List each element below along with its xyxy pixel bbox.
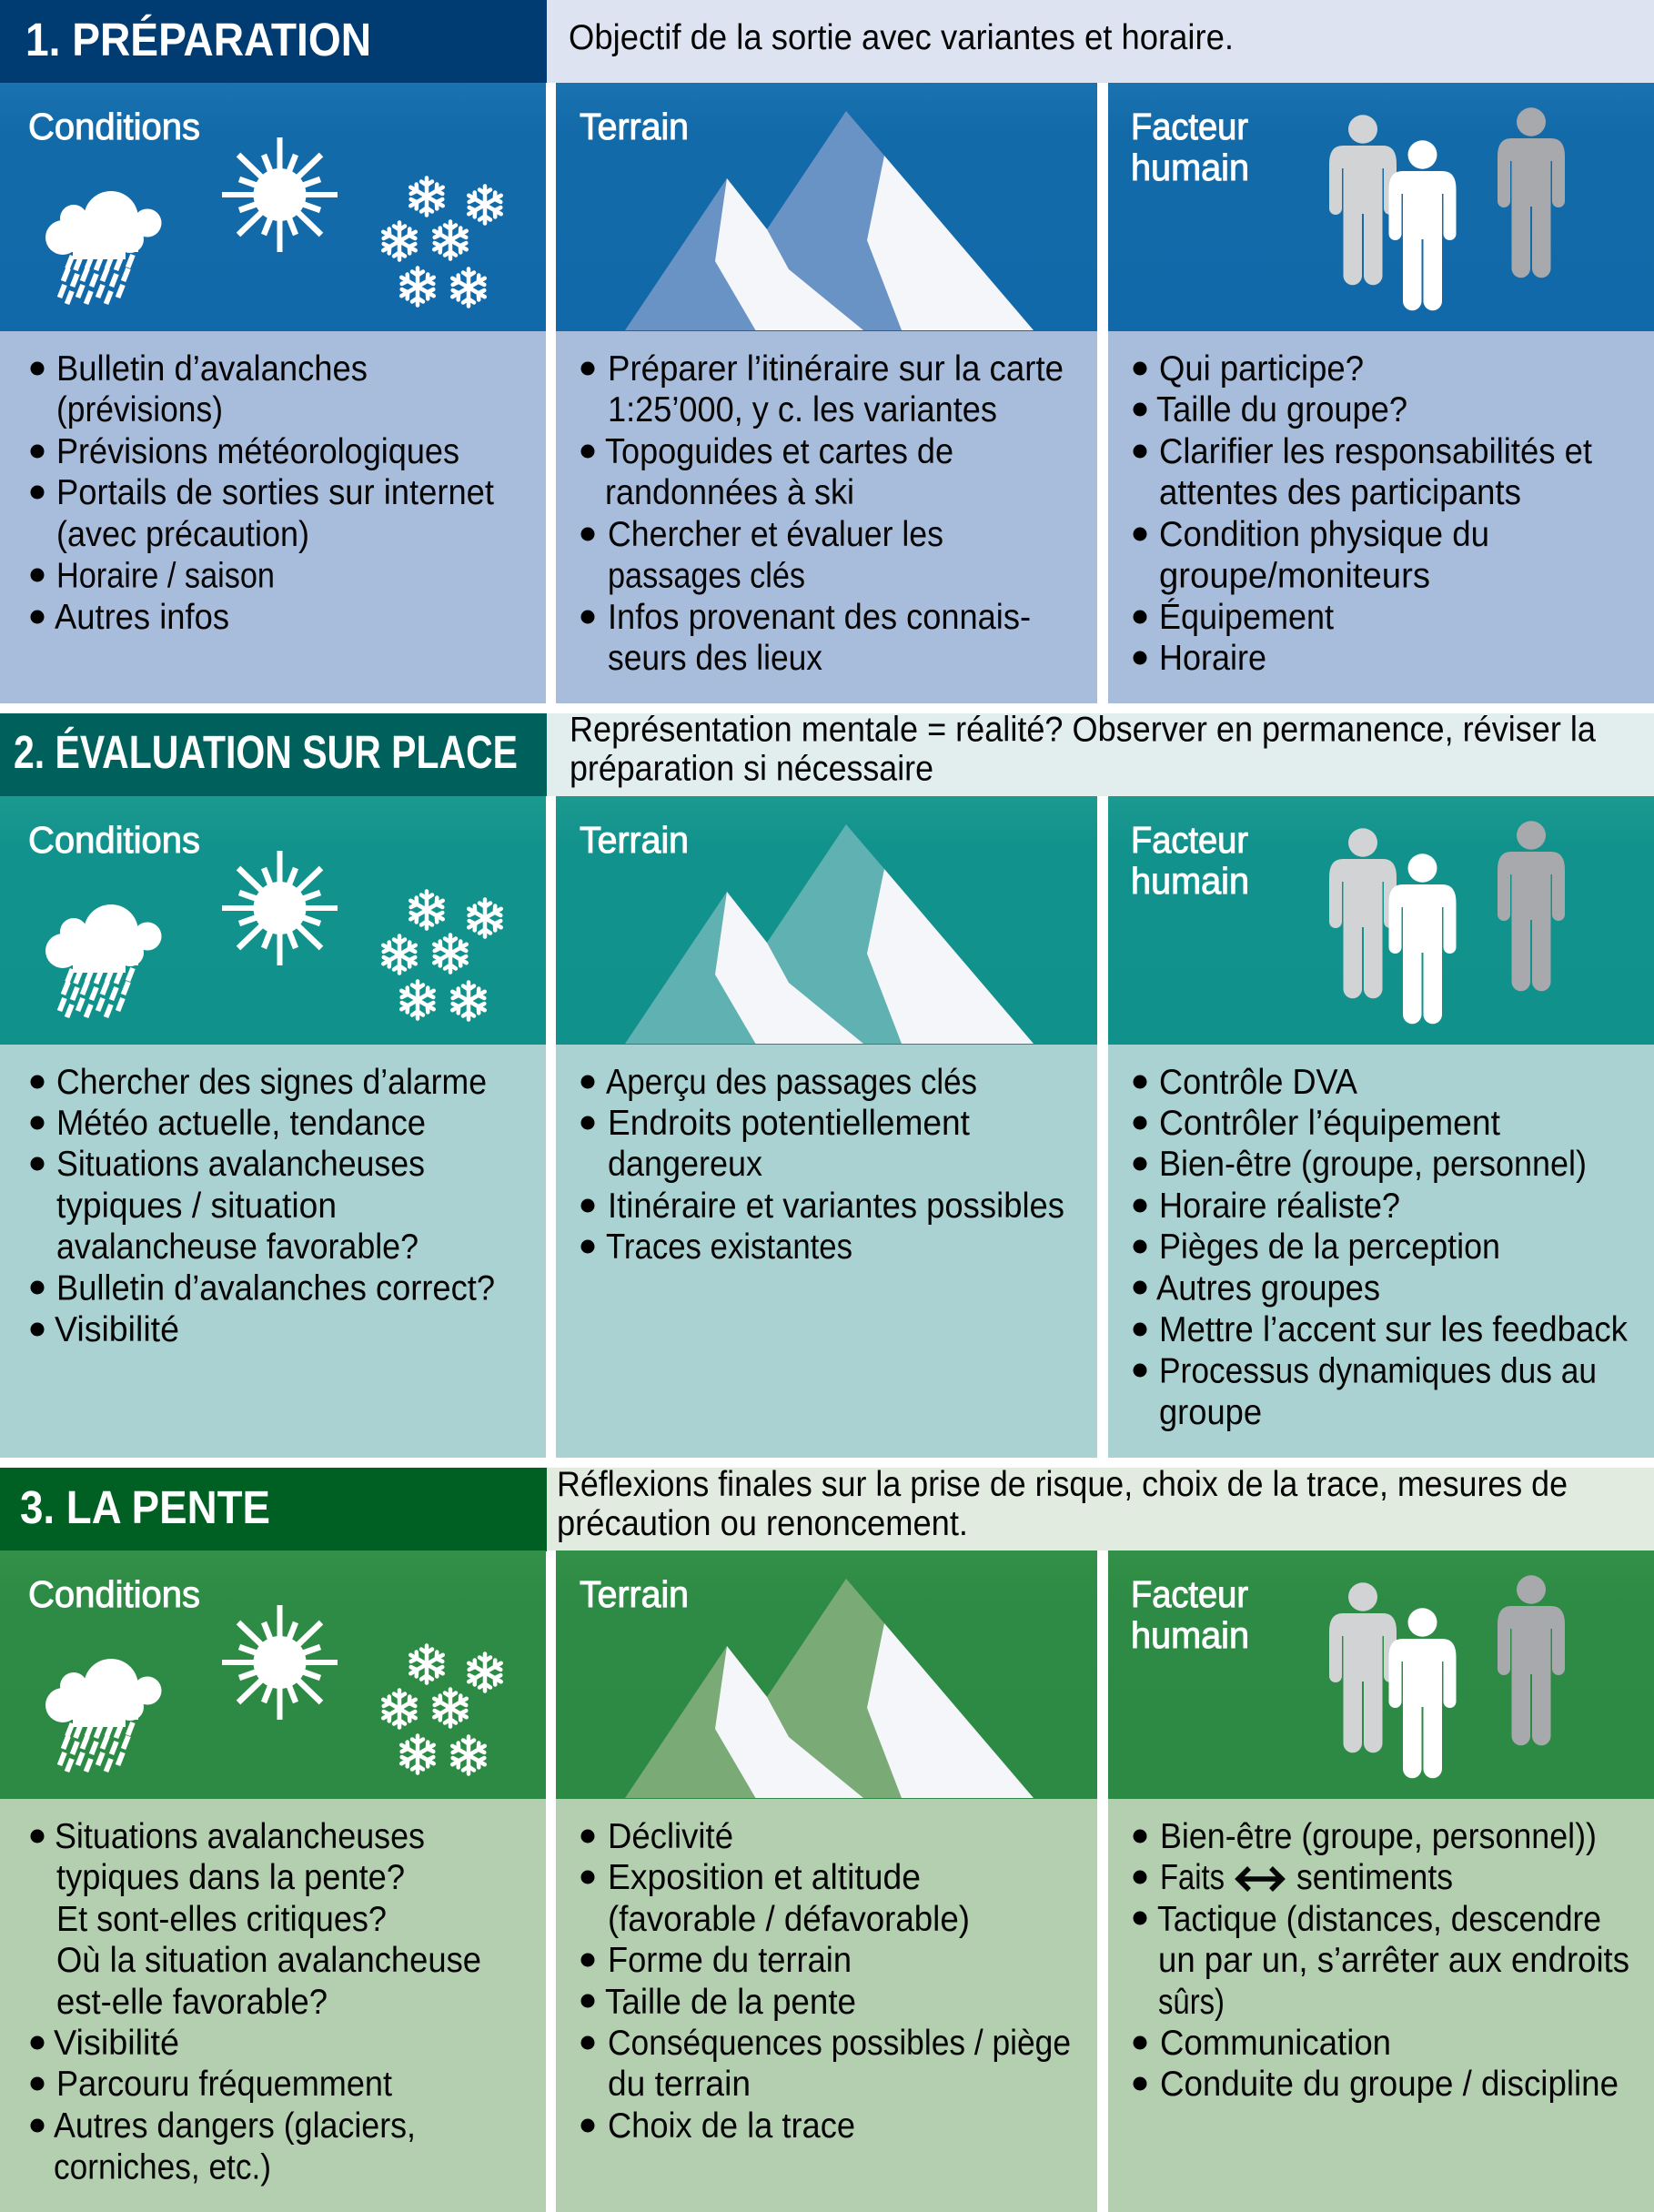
list: facteur humain: un par un, s’arrêter aux endroits	[1158, 1941, 1629, 1980]
section 1: préparation	[0, 0, 1654, 703]
icons: rain cloud, sun, snowflakes	[45, 137, 504, 306]
list: facteur humain: Contrôler l’équipement	[1159, 1104, 1500, 1143]
list: facteur humain: sentiments	[1296, 1858, 1453, 1897]
list: conditions: corniches, etc.)	[54, 2147, 271, 2187]
list: conditions	[31, 1063, 495, 1349]
list: conditions: Où la situation avalancheuse	[56, 1941, 481, 1980]
heading: terrain: Terrain	[580, 1573, 689, 1615]
heading: facteur humain: humain	[1131, 860, 1249, 902]
list: facteur humain: Bien-être (groupe, personnel)	[1159, 1145, 1587, 1184]
list: terrain: Préparer l’itinéraire sur la carte	[608, 349, 1064, 389]
list: facteur humain: attentes des participants	[1159, 473, 1521, 512]
heading: conditions: Conditions	[28, 106, 200, 147]
panel: terrain	[556, 83, 1097, 703]
icon: people	[1329, 107, 1565, 310]
list: terrain	[580, 349, 1064, 678]
list: terrain: Taille de la pente	[605, 1983, 856, 2022]
list: terrain: Conséquences possibles / piège	[608, 2024, 1071, 2063]
list: conditions: Autres infos	[55, 598, 229, 637]
panel: facteur humain	[1108, 796, 1654, 1458]
list: conditions: Situations avalancheuses	[55, 1817, 425, 1856]
list: terrain: dangereux	[608, 1145, 762, 1184]
list: facteur humain: Conduite du groupe / discipline	[1160, 2065, 1619, 2104]
list: conditions: Visibilité	[55, 1310, 179, 1349]
intro bar	[547, 0, 1654, 83]
icon: mountains	[625, 824, 1034, 1044]
title bar: 2. Évaluation sur place: 2. ÉVALUATION SUR PLACE	[14, 726, 518, 778]
icon: mountains	[625, 1579, 1034, 1798]
heading: facteur humain: humain	[1131, 1614, 1249, 1656]
list: conditions: Et sont-elles critiques?	[56, 1900, 387, 1939]
list: facteur humain: groupe/moniteurs	[1159, 557, 1430, 595]
list: facteur humain: groupe	[1159, 1393, 1262, 1432]
icons: rain cloud, sun, snowflakes	[45, 851, 504, 1019]
intro bar	[547, 1465, 1654, 1550]
list: conditions: est-elle favorable?	[56, 1983, 328, 2022]
list: terrain: Chercher et évaluer les	[608, 515, 943, 554]
list: terrain: Itinéraire et variantes possibles	[608, 1187, 1064, 1226]
list: conditions: typiques / situation	[56, 1187, 337, 1226]
list: facteur humain: Communication	[1160, 2024, 1391, 2063]
title bar: 2. Évaluation sur place	[0, 713, 547, 796]
list: facteur humain: Faits	[1160, 1858, 1225, 1897]
heading: facteur humain: Facteur	[1131, 1573, 1248, 1615]
list: terrain	[580, 1817, 1071, 2146]
list: terrain: seurs des lieux	[608, 639, 822, 678]
list: conditions: avalancheuse favorable?	[56, 1227, 419, 1267]
list: conditions: Bulletin d’avalanches correct?	[56, 1268, 495, 1308]
heading: facteur humain: Facteur	[1131, 819, 1248, 861]
list: facteur humain: Horaire	[1159, 639, 1266, 678]
list: conditions: Visibilité	[54, 2024, 179, 2063]
list: terrain: Aperçu des passages clés	[606, 1063, 977, 1102]
panel: terrain	[556, 1550, 1097, 2212]
title bar: 1. Préparation: 1. PRÉPARATION	[25, 14, 371, 66]
list: conditions: Parcouru fréquemment	[56, 2065, 392, 2104]
heading: conditions: Conditions	[28, 819, 200, 861]
list: conditions: Portails de sorties sur internet	[56, 473, 494, 512]
list: conditions: Horaire / saison	[56, 557, 275, 595]
title bar: 1. Préparation	[0, 0, 547, 83]
list: conditions: Météo actuelle, tendance	[56, 1104, 426, 1143]
list: conditions: (prévisions)	[56, 390, 223, 429]
heading: facteur humain	[1131, 819, 1249, 902]
heading: facteur humain	[1131, 1573, 1249, 1656]
list: conditions: Prévisions météorologiques	[56, 432, 459, 471]
list: conditions: Chercher des signes d’alarme	[56, 1063, 487, 1102]
list: conditions: Autres dangers (glaciers,	[54, 2106, 416, 2146]
list: terrain: Déclivité	[608, 1817, 733, 1856]
heading: facteur humain: humain	[1131, 146, 1249, 188]
intro bar	[547, 710, 1654, 796]
list: terrain: Infos provenant des connais-	[608, 598, 1031, 637]
section 2: évaluation sur place	[0, 710, 1654, 1458]
panel: conditions	[0, 796, 546, 1458]
heading: conditions: Conditions	[28, 1573, 200, 1615]
list: terrain: passages clés	[608, 557, 805, 595]
list: facteur humain: Horaire réaliste?	[1159, 1187, 1400, 1226]
intro bar: préparation si nécessaire	[570, 750, 933, 788]
panel: conditions	[0, 83, 546, 703]
intro bar: précaution ou renoncement.	[557, 1504, 968, 1543]
list: conditions	[31, 1817, 481, 2187]
list: facteur humain: Autres groupes	[1156, 1268, 1380, 1308]
icon: people	[1329, 821, 1565, 1024]
list: facteur humain: Mettre l’accent sur les feedback	[1159, 1310, 1628, 1349]
list: terrain: Endroits potentiellement	[608, 1104, 970, 1143]
icon: people	[1329, 1575, 1565, 1778]
heading: facteur humain: Facteur	[1131, 106, 1248, 147]
list: facteur humain: Taille du groupe?	[1156, 390, 1407, 429]
list: terrain: randonnées à ski	[605, 473, 854, 512]
intro bar: Objectif de la sortie avec variantes et horaire.	[569, 18, 1234, 57]
heading: facteur humain	[1131, 106, 1249, 188]
list: facteur humain	[1134, 349, 1592, 678]
title bar: 3. La pente: 3. LA PENTE	[20, 1481, 270, 1533]
list: terrain: Traces existantes	[606, 1227, 852, 1267]
list: facteur humain: Pièges de la perception	[1159, 1227, 1500, 1267]
heading: terrain: Terrain	[580, 106, 689, 147]
panel: terrain	[556, 796, 1097, 1458]
list: terrain: du terrain	[608, 2065, 751, 2104]
list: conditions: typiques dans la pente?	[56, 1858, 405, 1897]
panel: facteur humain	[1108, 83, 1654, 703]
panel: conditions	[0, 1550, 546, 2212]
list: facteur humain: Équipement	[1159, 598, 1334, 637]
list: terrain: 1:25’000, y c. les variantes	[608, 390, 997, 429]
list: facteur humain: Bien-être (groupe, personnel))	[1160, 1817, 1597, 1856]
list: conditions: Situations avalancheuses	[56, 1145, 425, 1184]
intro bar: Réflexions finales sur la prise de risque, choix de la trace, mesures de	[557, 1465, 1568, 1504]
list: terrain: Exposition et altitude	[608, 1858, 921, 1897]
title bar: 3. La pente	[0, 1468, 547, 1551]
icons: rain cloud, sun, snowflakes	[45, 1605, 504, 1774]
list: facteur humain: Qui participe?	[1159, 349, 1364, 389]
panel: facteur humain	[1108, 1550, 1654, 2212]
intro bar: Représentation mentale = réalité? Observer en permanence, réviser la	[570, 710, 1596, 750]
list: conditions	[31, 349, 494, 637]
list: terrain: Topoguides et cartes de	[605, 432, 953, 471]
list: conditions: (avec précaution)	[56, 515, 309, 554]
list: facteur humain: Tactique (distances, descendre	[1157, 1900, 1601, 1939]
list: facteur humain: Processus dynamiques dus au	[1159, 1352, 1597, 1390]
list: terrain	[580, 1063, 1064, 1267]
list: conditions: Bulletin d’avalanches	[56, 349, 368, 389]
list: facteur humain: Condition physique du	[1159, 515, 1489, 554]
list: terrain: Choix de la trace	[608, 2106, 855, 2146]
list: facteur humain: Clarifier les responsabilités et	[1159, 432, 1592, 471]
list: facteur humain	[1134, 1063, 1628, 1432]
section 3: la pente	[0, 1465, 1654, 2212]
list: facteur humain	[1134, 1817, 1629, 2104]
list: facteur humain: Contrôle DVA	[1159, 1063, 1357, 1102]
list: terrain: (favorable / défavorable)	[608, 1900, 970, 1939]
list: facteur humain: sûrs)	[1158, 1983, 1225, 2022]
list: terrain: Forme du terrain	[608, 1941, 852, 1980]
heading: terrain: Terrain	[580, 819, 689, 861]
icon: mountains	[625, 111, 1034, 330]
